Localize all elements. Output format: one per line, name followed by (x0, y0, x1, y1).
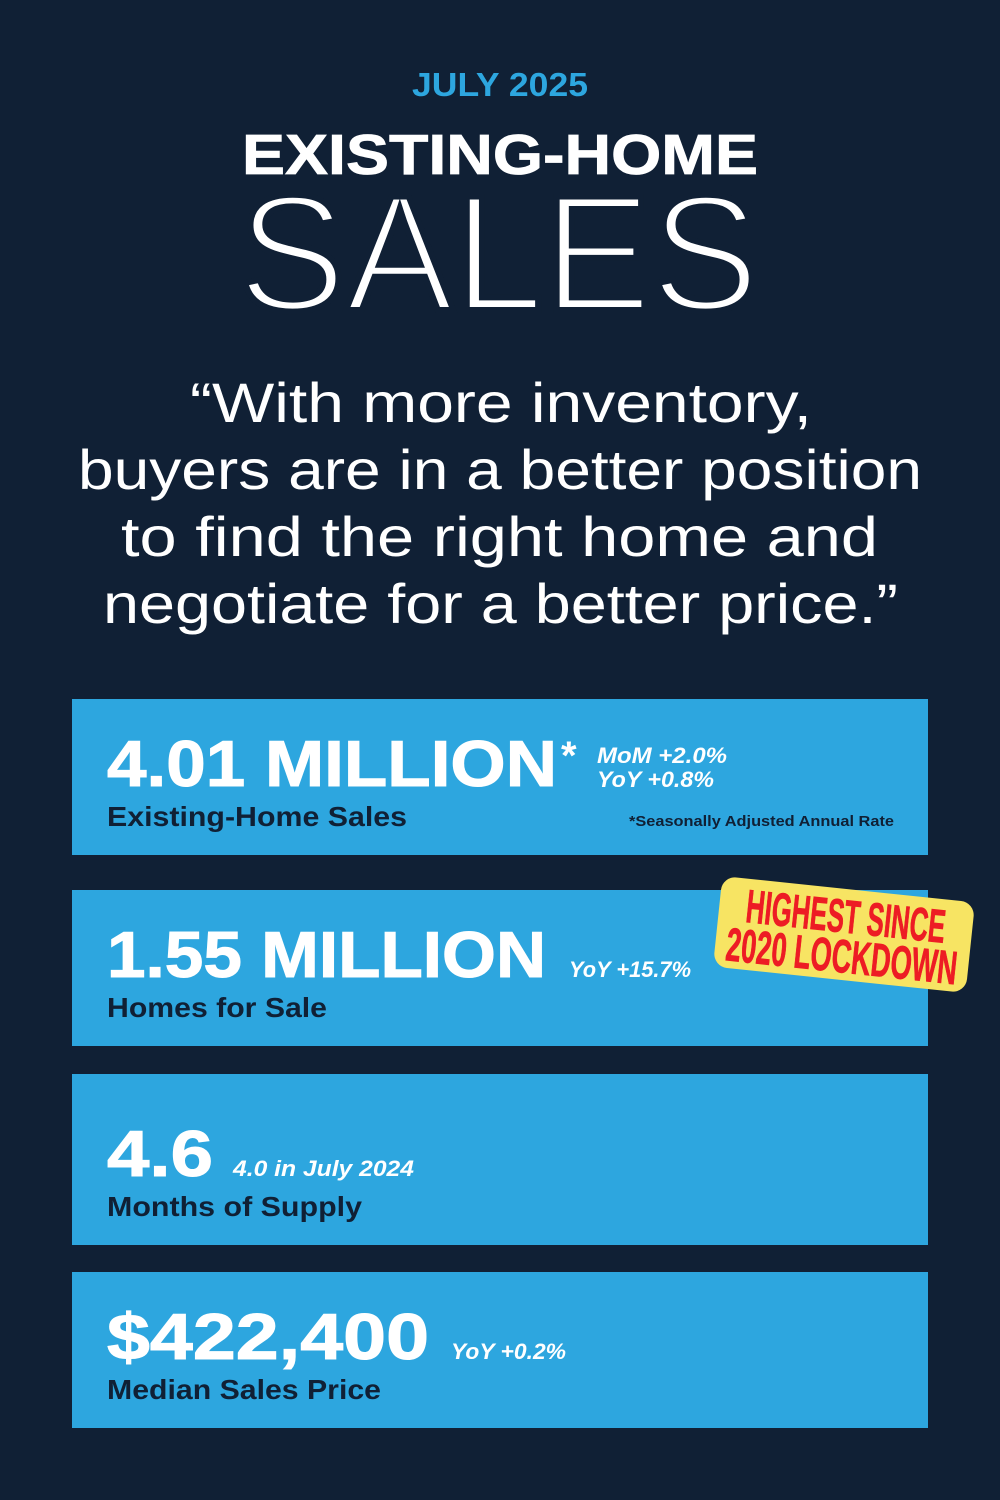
price change: YoY +0.2% (451, 1339, 566, 1364)
price label: Median Sales Price (107, 1374, 381, 1405)
quote: “With more inventory, (190, 371, 812, 434)
inventory label: Homes for Sale (107, 992, 327, 1023)
inventory figure: 1.55 MILLION (107, 918, 546, 991)
sales change: YoY +0.8% (597, 767, 714, 792)
sales change: MoM +2.0% (597, 743, 727, 768)
quote: to find the right home and (121, 505, 878, 568)
supply figure: 4.6 (107, 1117, 213, 1190)
title line 2: SALES (238, 161, 759, 345)
panel: homes for sale (72, 890, 928, 1046)
panel: months of supply (72, 1074, 928, 1245)
footnote: *Seasonally Adjusted Annual Rate (629, 813, 894, 830)
sales figure: 4.01 MILLION (107, 727, 557, 800)
supply label: Months of Supply (107, 1191, 362, 1222)
callout sticker (713, 876, 975, 996)
date heading: JULY 2025 (412, 66, 588, 103)
quote (78, 371, 922, 635)
panel: existing-home sales (72, 699, 928, 855)
title line 1: EXISTING-HOME (242, 123, 758, 187)
price figure: $422,400 (107, 1300, 429, 1373)
quote: buyers are in a better position (78, 438, 922, 501)
quote: negotiate for a better price.” (103, 572, 898, 635)
supply comparison: 4.0 in July 2024 (232, 1156, 414, 1181)
inventory change: YoY +15.7% (569, 957, 691, 982)
sales change (597, 743, 727, 792)
title (238, 123, 759, 345)
sales label: Existing-Home Sales (107, 801, 407, 832)
asterisk: * (561, 734, 577, 778)
panel: median sales price (72, 1272, 928, 1428)
